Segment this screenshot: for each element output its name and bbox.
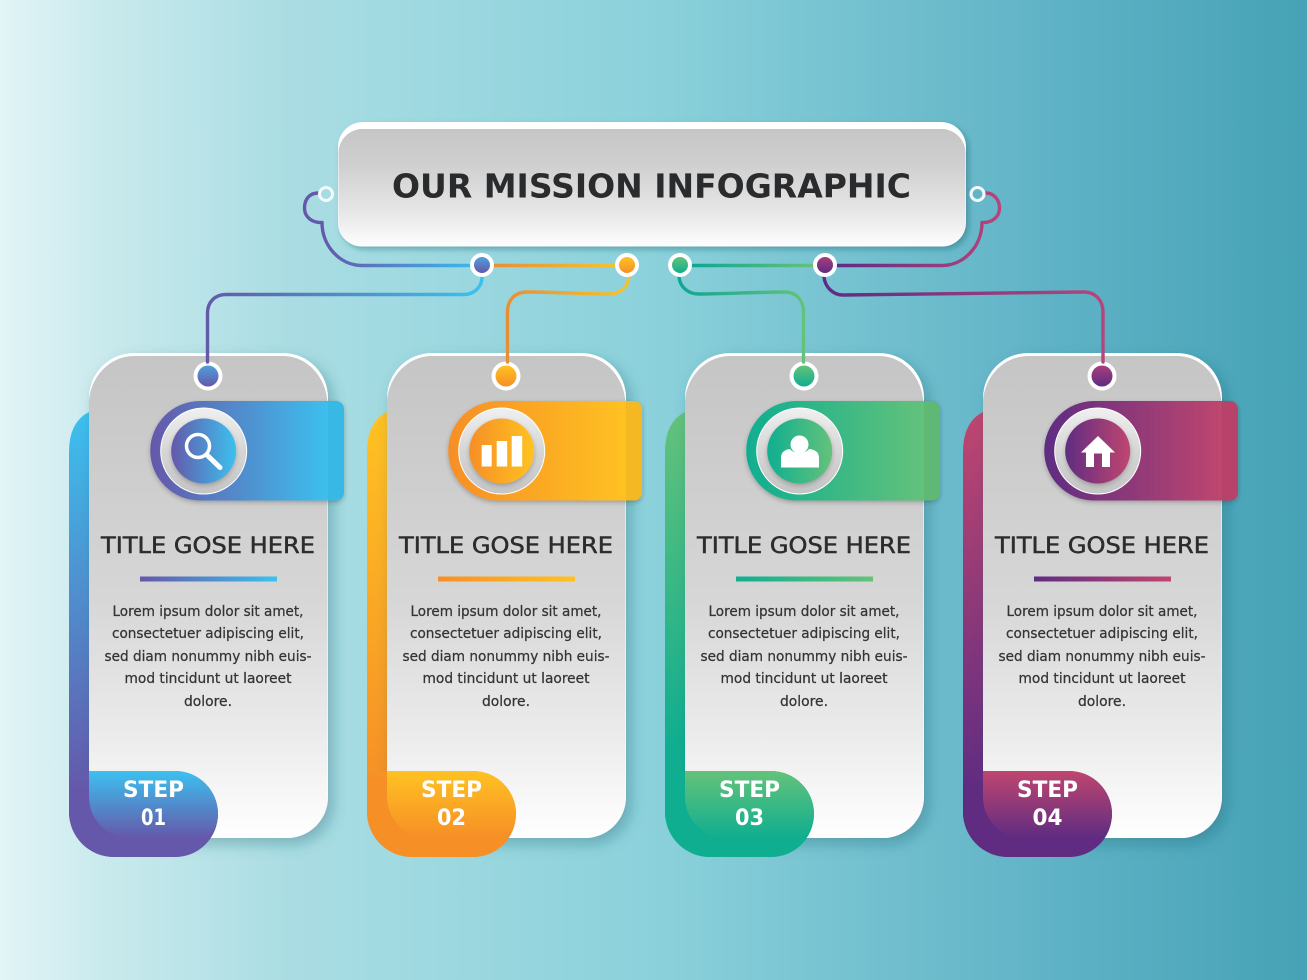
card body	[89, 353, 328, 838]
step tab: STEP	[123, 778, 184, 803]
connector: node 1 to card 1	[208, 277, 482, 362]
coloured back band	[69, 412, 218, 857]
connector: node 3 to node 4	[690, 264, 816, 267]
heading: TITLE GOSE HERE	[100, 534, 315, 559]
body text: Lorem ipsum dolor sit amet,	[1006, 604, 1198, 620]
step tab	[963, 771, 1112, 857]
body text: sed diam nonummy nibh euis-	[998, 649, 1206, 665]
header right end node	[971, 188, 984, 200]
card top node	[790, 362, 818, 390]
connector: node 4 to header right	[835, 193, 1000, 266]
connector: node 2 to card 2	[508, 277, 629, 362]
panel: header	[338, 122, 966, 246]
heading: TITLE GOSE HERE	[994, 534, 1209, 559]
body text	[402, 604, 610, 710]
body text: dolore.	[184, 694, 232, 710]
step tab	[69, 771, 218, 857]
icon ribbon	[150, 401, 344, 501]
connector: node 3 to card 3	[679, 277, 804, 362]
icon: person	[757, 408, 843, 494]
heading: TITLE GOSE HERE	[398, 534, 613, 559]
step tab: 01	[141, 806, 166, 831]
body text: sed diam nonummy nibh euis-	[104, 649, 312, 665]
node 4	[813, 253, 837, 277]
icon ribbon	[1044, 401, 1238, 501]
step tab	[665, 771, 814, 857]
icon ribbon	[746, 401, 940, 501]
coloured back band	[963, 412, 1112, 857]
node 3	[668, 253, 692, 277]
body text: consectetuer adipiscing elit,	[112, 626, 304, 642]
step tab: STEP	[421, 778, 482, 803]
card body	[387, 353, 626, 838]
icon: house	[1055, 408, 1141, 494]
body text: consectetuer adipiscing elit,	[1006, 626, 1198, 642]
body text: mod tincidunt ut laoreet	[422, 671, 590, 687]
step tab	[367, 771, 516, 857]
body text: consectetuer adipiscing elit,	[410, 626, 602, 642]
connector: node 1 to node 2	[492, 264, 618, 267]
body text: Lorem ipsum dolor sit amet,	[708, 604, 900, 620]
body text: dolore.	[482, 694, 530, 710]
body text	[998, 604, 1206, 710]
body text: mod tincidunt ut laoreet	[1018, 671, 1186, 687]
underline	[1034, 576, 1171, 582]
body text: mod tincidunt ut laoreet	[124, 671, 292, 687]
panel: step 01 card	[69, 353, 344, 857]
panel: step 04 card	[963, 353, 1238, 857]
body text: consectetuer adipiscing elit,	[708, 626, 900, 642]
icon: bar chart	[459, 408, 545, 494]
body text: mod tincidunt ut laoreet	[720, 671, 888, 687]
heading: TITLE GOSE HERE	[696, 534, 911, 559]
body text: sed diam nonummy nibh euis-	[402, 649, 610, 665]
icon: magnifier	[161, 408, 247, 494]
card top node	[492, 362, 520, 390]
node 1	[470, 253, 494, 277]
coloured back band	[665, 412, 814, 857]
node 2	[615, 253, 639, 277]
connector: node 4 to card 4	[824, 277, 1103, 362]
underline	[140, 576, 277, 582]
icon ribbon	[448, 401, 642, 501]
body text: Lorem ipsum dolor sit amet,	[410, 604, 602, 620]
panel: step 03 card	[665, 353, 940, 857]
body text: Lorem ipsum dolor sit amet,	[112, 604, 304, 620]
step tab: STEP	[719, 778, 780, 803]
connector lines	[208, 193, 1103, 362]
step tab: 04	[1032, 806, 1062, 831]
coloured back band	[367, 412, 516, 857]
title: OUR MISSION INFOGRAPHIC	[392, 168, 911, 206]
underline	[438, 576, 575, 582]
body text	[104, 604, 312, 710]
card body	[983, 353, 1222, 838]
underline	[736, 576, 873, 582]
card body	[685, 353, 924, 838]
connector: header left to node 1	[304, 193, 472, 266]
header left end node	[320, 188, 332, 200]
body text: dolore.	[780, 694, 828, 710]
body text	[700, 604, 908, 710]
card top node	[1088, 362, 1116, 390]
step tab: STEP	[1017, 778, 1078, 803]
panel: step 02 card	[367, 353, 642, 857]
step tab: 02	[437, 806, 466, 831]
body text: dolore.	[1078, 694, 1126, 710]
body text: sed diam nonummy nibh euis-	[700, 649, 908, 665]
step tab: 03	[735, 806, 764, 831]
card top node	[194, 362, 222, 390]
